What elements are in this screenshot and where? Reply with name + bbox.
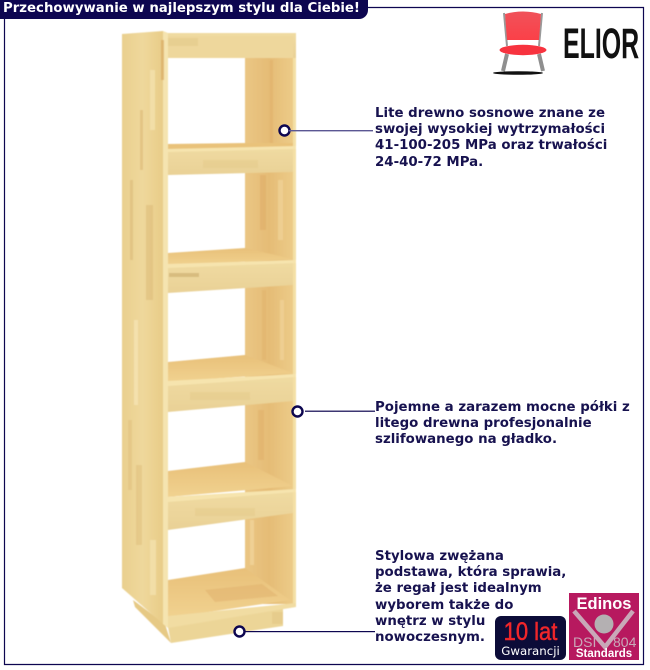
- shelf 2: [168, 248, 296, 293]
- badge: 10 lat guarantee: 10 lat: [504, 618, 558, 645]
- callout line 3: [233, 625, 619, 642]
- left side panel: [122, 31, 168, 628]
- callout text 3: podstawa, która sprawia,: [375, 565, 566, 580]
- icon: red chair logo: [493, 12, 546, 75]
- title banner: Przechowywanie w najlepszym stylu dla Ciebie!: [3, 1, 360, 16]
- badge: Edinos DSI 804 Standards: DSI: [573, 634, 596, 650]
- callout text 1: 41-100-205 MPa oraz trwałości: [375, 138, 607, 153]
- callout text 1: [375, 106, 607, 170]
- right back panel: [245, 38, 296, 606]
- badge: Edinos DSI 804 Standards: Edinos: [576, 595, 632, 613]
- callout text 1: Lite drewno sosnowe znane ze: [375, 106, 605, 121]
- plinth: [133, 600, 283, 643]
- badge: 10 lat guarantee: [495, 616, 566, 660]
- shelf 3: [168, 355, 296, 412]
- badge: Edinos DSI 804 Standards: 804: [613, 634, 637, 650]
- callout text 1: swojej wysokiej wytrzymałości: [375, 122, 605, 137]
- shelf 4: [168, 462, 296, 530]
- shelf 5 bottom: [168, 568, 296, 628]
- callout text 3: nowoczesnym.: [375, 630, 485, 645]
- shelf 1: [168, 143, 296, 175]
- callout text 2: Pojemne a zarazem mocne półki z: [375, 400, 630, 415]
- badge: 10 lat guarantee: Gwarancji: [501, 644, 560, 658]
- callout line 2: [291, 405, 375, 418]
- badge: Edinos DSI 804 Standards: [569, 593, 639, 660]
- callout text 2: [375, 400, 630, 447]
- badge: Edinos DSI 804 Standards: Standards: [576, 648, 632, 660]
- callout line 1: [278, 12, 536, 137]
- callout text 3: wyborem także do: [375, 598, 513, 613]
- callout text 3: Stylowa zwężana: [375, 549, 504, 564]
- callout text 2: szlifowanego na gładko.: [375, 432, 557, 447]
- callout text 3: wnętrz w stylu: [375, 614, 485, 629]
- top rail: [163, 33, 296, 58]
- callout text 2: litego drewna profesjonalnie: [375, 416, 592, 431]
- callout text 3: że regał jest idealnym: [375, 581, 542, 596]
- callout text 1: 24-40-72 MPa.: [375, 155, 483, 170]
- callout text 3: [375, 549, 566, 645]
